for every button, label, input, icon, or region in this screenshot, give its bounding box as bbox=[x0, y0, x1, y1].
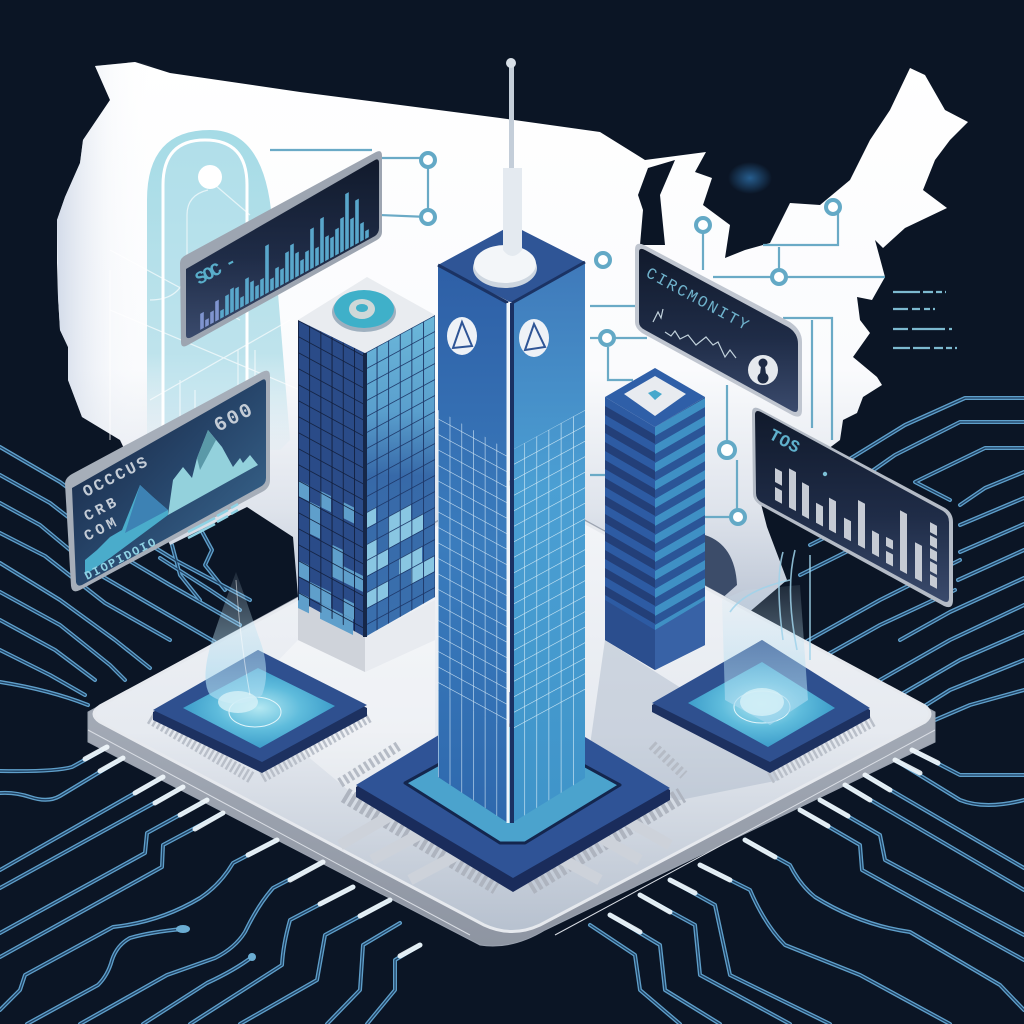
lit windows: left face bbox=[298, 480, 365, 641]
left building bbox=[298, 277, 435, 672]
labels: COM bbox=[82, 515, 120, 545]
trace end dots bbox=[176, 925, 256, 961]
label: CIRCMONITY bbox=[643, 265, 752, 335]
legend stripes bbox=[188, 504, 238, 538]
area chart bbox=[85, 430, 258, 575]
labels: CRB bbox=[82, 495, 120, 525]
line chart bbox=[653, 309, 736, 358]
bar chart bbox=[202, 182, 367, 329]
connector nodes bbox=[421, 153, 840, 524]
panel: CIRCMONITY bbox=[635, 244, 802, 417]
labels: DIOPIDOIO bbox=[82, 536, 158, 584]
labels: OCCCUS bbox=[80, 453, 151, 501]
labels bbox=[80, 400, 257, 584]
panel: TOS bbox=[752, 408, 953, 607]
left hologram bbox=[205, 572, 266, 713]
legend dashes bbox=[893, 292, 957, 348]
trace highlights bbox=[85, 747, 938, 956]
main tower bbox=[438, 58, 585, 823]
right building bbox=[605, 368, 705, 670]
labels: 600 bbox=[211, 400, 257, 438]
icon: left badge bbox=[447, 317, 477, 355]
left chip bbox=[150, 650, 370, 778]
antenna bbox=[473, 58, 537, 288]
label: TOS bbox=[765, 427, 802, 459]
panel: SOC chart bbox=[180, 151, 382, 346]
connectors bbox=[270, 150, 885, 517]
icon: right badge bbox=[519, 319, 549, 357]
right chip bbox=[652, 640, 874, 778]
right hologram bbox=[722, 550, 810, 725]
bar chart bbox=[775, 440, 937, 590]
platform bbox=[88, 480, 935, 946]
icon: roof disc bbox=[332, 290, 396, 332]
lake bbox=[638, 160, 675, 245]
circuit traces bbox=[0, 398, 1024, 1024]
icon: badge bbox=[748, 355, 778, 385]
lit windows: right face bbox=[365, 476, 434, 609]
hologram capsule bbox=[110, 130, 300, 480]
main chip bbox=[340, 692, 684, 892]
panel: 600 area chart bbox=[65, 371, 270, 591]
window grid bbox=[438, 410, 508, 730]
shadow blob bbox=[590, 530, 737, 600]
label: SOC - bbox=[192, 252, 241, 290]
map of the United States bbox=[57, 62, 968, 620]
